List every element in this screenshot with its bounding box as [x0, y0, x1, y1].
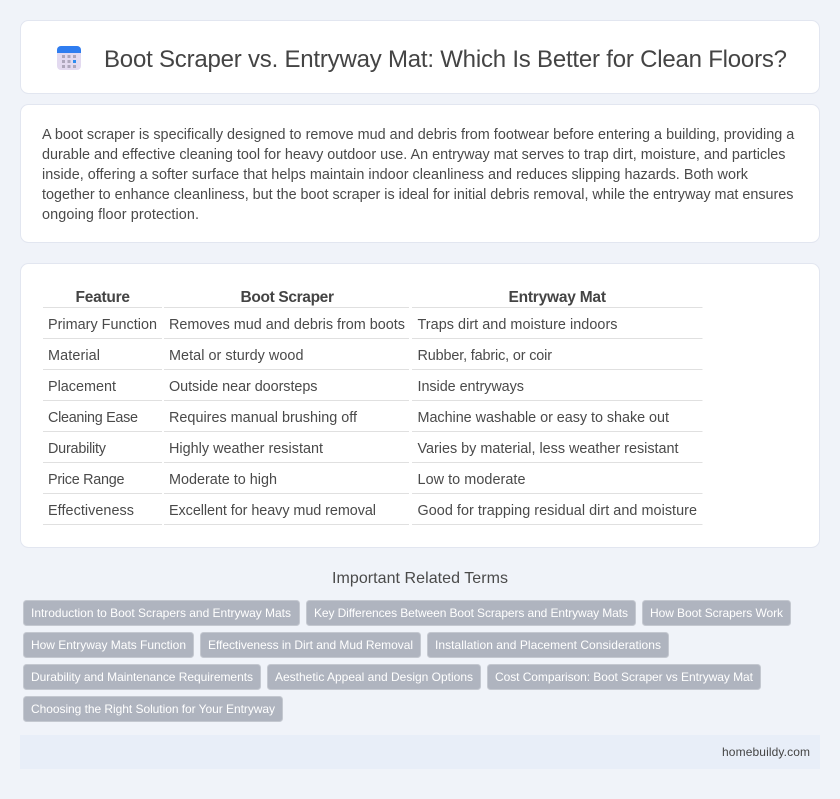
table row: material — [48, 348, 552, 364]
table row: material: Metal or sturdy wood — [169, 348, 304, 364]
table row: durability: Varies by material, less weather resistant — [418, 441, 678, 457]
tag list: related terms: How Boot Scrapers Work — [650, 606, 784, 620]
table row: material: Rubber, fabric, or coir — [418, 348, 552, 364]
table row: durability: Durability — [48, 441, 107, 457]
heading: important related terms: Important Related Terms — [332, 570, 508, 587]
tag list: related terms: Effectiveness in Dirt and Mud Removal — [208, 638, 413, 652]
text block: description: together to enhance cleanliness, but the boot scraper is ideal for initial debris removal, while the entryway mat ensures — [42, 187, 794, 203]
table row: placement — [48, 379, 524, 395]
tag list: related terms: Introduction to Boot Scrapers and Entryway Mats — [31, 606, 291, 620]
panel: title header — [20, 20, 820, 94]
tag list: related terms: Installation and Placement Considerations — [435, 638, 661, 652]
table row: effectiveness — [48, 503, 697, 519]
table row: effectiveness: Effectiveness — [48, 503, 134, 519]
table row: primary function: Primary Function — [48, 317, 157, 333]
icon: calendar — [57, 46, 81, 70]
table row: placement: Inside entryways — [418, 379, 524, 395]
tag list: related terms — [24, 600, 790, 722]
table row: cleaning ease: Cleaning Ease — [48, 410, 138, 426]
tag list: related terms: How Entryway Mats Function — [31, 638, 186, 652]
text block: description: ongoing floor protection. — [42, 207, 199, 223]
table row: material: Material — [48, 348, 100, 364]
table row: durability — [48, 441, 678, 457]
table row: price range: Moderate to high — [169, 472, 277, 488]
text block: description: inside, offering a softer surface that helps maintain indoor cleanliness and reduces slipping hazards. Both work — [42, 167, 749, 183]
table row: primary function: Traps dirt and moisture indoors — [418, 317, 618, 333]
text block: description — [42, 127, 794, 223]
table row: price range: Low to moderate — [418, 472, 526, 488]
table row: placement: Outside near doorsteps — [169, 379, 318, 395]
footer source text: homebuildy.com — [722, 745, 810, 759]
table row: cleaning ease: Requires manual brushing off — [169, 410, 358, 426]
table row: price range: Price Range — [48, 472, 124, 488]
text block: description: A boot scraper is specifically designed to remove mud and debris from footwear before entering a building, providing a — [42, 127, 794, 143]
table row: effectiveness: Good for trapping residual dirt and moisture — [418, 503, 697, 519]
table header: Entryway Mat — [508, 289, 606, 306]
tag list: related terms: Cost Comparison: Boot Scraper vs Entryway Mat — [495, 670, 754, 684]
table row: primary function — [48, 317, 618, 333]
table row: effectiveness: Excellent for heavy mud removal — [169, 503, 376, 519]
tag list: related terms: Durability and Maintenance Requirements — [31, 670, 253, 684]
tag list: related terms: Key Differences Between Boot Scrapers and Entryway Mats — [314, 606, 628, 620]
table row: price range — [48, 472, 526, 488]
table row: cleaning ease — [48, 410, 669, 426]
table row: cleaning ease: Machine washable or easy to shake out — [418, 410, 669, 426]
title: Boot Scraper vs. Entryway Mat: Which Is Better for Clean Floors? — [104, 46, 787, 73]
panel: intro paragraph — [20, 104, 820, 242]
panel: comparison table — [20, 264, 820, 548]
table header: Boot Scraper — [240, 289, 334, 306]
footer bar — [20, 735, 820, 769]
tag list: related terms: Choosing the Right Solution for Your Entryway — [31, 702, 275, 716]
tag list: related terms: Aesthetic Appeal and Design Options — [275, 670, 473, 684]
table header: Feature — [76, 289, 130, 306]
table header — [76, 289, 606, 306]
table row: durability: Highly weather resistant — [169, 441, 323, 457]
table row: primary function: Removes mud and debris from boots — [169, 317, 405, 333]
table row: placement: Placement — [48, 379, 116, 395]
text block: description: durable and effective cleaning tool for heavy outdoor use. An entryway mat serves to trap dirt, moisture, and particles — [42, 147, 786, 163]
